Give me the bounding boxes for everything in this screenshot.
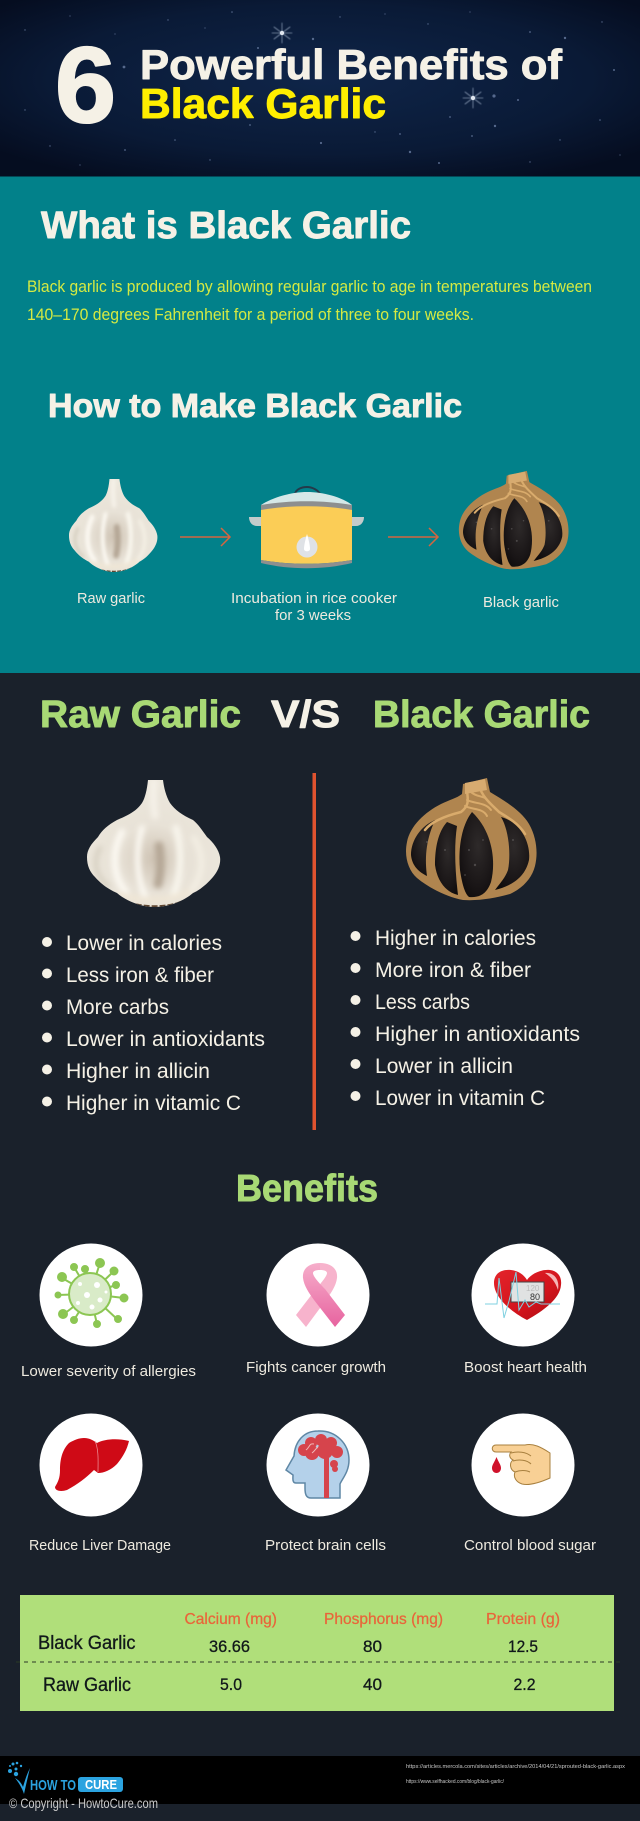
list: raw garlic traits: More carbs (66, 996, 169, 1019)
benefit: lower severity of allergies (21, 1244, 196, 1380)
list: raw garlic traits: Less iron & fiber (66, 964, 214, 987)
logo: How To Cure: HOW TO (30, 1777, 76, 1794)
heading: How to Make Black Garlic: How to Make Black Garlic (48, 387, 462, 424)
label: black garlic: Black garlic (483, 594, 559, 611)
list: black garlic traits: Less carbs (375, 991, 470, 1014)
icon: heart monitor: 120 (526, 1284, 540, 1293)
title: 6 Powerful Benefits of Black Garlic (55, 24, 563, 145)
logo: How To Cure: CURE (85, 1777, 117, 1792)
icon: black garlic large (406, 778, 537, 900)
sources: https://articles.mercola.com/sites/articles/archive/2014/04/21/sprouted-black-garlic.aspx (406, 1764, 625, 1770)
icon: pink ribbon (296, 1263, 345, 1327)
icon: rice cooker (249, 487, 364, 568)
row: black garlic: Black Garlic (38, 1633, 136, 1654)
list: black garlic traits: Lower in allicin (375, 1055, 513, 1078)
logo: How To Cure (8, 1762, 123, 1794)
benefit: control blood sugar (464, 1414, 596, 1554)
label: incubation: for 3 weeks (275, 607, 351, 624)
list: raw garlic traits: Lower in calories (66, 932, 222, 955)
panel: what is black garlic and how to make it (0, 176, 640, 673)
row: raw garlic: 5.0 (220, 1675, 242, 1694)
heading: raw garlic versus black garlic: V/S (271, 694, 340, 736)
benefit: fights cancer growth (246, 1244, 386, 1376)
row: black garlic: 36.66 (209, 1637, 250, 1656)
icon: virus (56, 1259, 128, 1327)
sources: https://www.selfhacked.com/blog/black-garlic/ (406, 1779, 505, 1785)
column headers (184, 1611, 560, 1628)
text block: definition (27, 278, 592, 324)
icon: heart monitor (485, 1270, 561, 1320)
panel: footer (0, 1756, 640, 1811)
label: Protect brain cells (265, 1537, 386, 1554)
list: black garlic traits (350, 927, 580, 1110)
heading: raw garlic versus black garlic: Raw Garlic (40, 694, 241, 736)
text block: definition: Black garlic is produced by allowing regular garlic to age in temperatures between (27, 278, 592, 296)
heading: raw garlic versus black garlic: Black Garlic (373, 694, 590, 736)
icon: head with brain (286, 1431, 349, 1498)
label: raw garlic: Raw garlic (77, 590, 145, 607)
list: raw garlic traits: Lower in antioxidants (66, 1028, 265, 1051)
panel: raw garlic comparison (42, 780, 265, 1115)
list: raw garlic traits: Higher in vitamic C (66, 1092, 241, 1115)
panel: nutrition table (16, 1595, 620, 1711)
list: raw garlic traits: Higher in allicin (66, 1060, 210, 1083)
panel: header starfield (0, 0, 640, 176)
column headers: Calcium (mg) (184, 1611, 277, 1628)
label: Reduce Liver Damage (29, 1537, 171, 1554)
label: Control blood sugar (464, 1537, 596, 1554)
benefit: protect brain cells (265, 1414, 386, 1554)
panel: black garlic comparison (350, 778, 580, 1110)
text block: definition: 140–170 degrees Fahrenheit for a period of three to four weeks. (27, 306, 474, 324)
arrow: raw garlic to cooker (180, 528, 230, 546)
column headers: Protein (g) (486, 1611, 560, 1628)
row: raw garlic (43, 1675, 536, 1696)
benefit: boost heart health (464, 1244, 587, 1376)
label: incubation: Incubation in rice cooker (231, 590, 397, 607)
row: black garlic: 12.5 (508, 1637, 538, 1656)
list: black garlic traits: Higher in antioxidants (375, 1023, 580, 1046)
icon: liver (55, 1438, 129, 1491)
title: 6 Powerful Benefits of Black Garlic: 6 (55, 24, 116, 145)
list: black garlic traits: Higher in calories (375, 927, 536, 950)
column headers: Phosphorus (mg) (324, 1611, 443, 1628)
icon: black garlic (459, 471, 569, 569)
copyright: © Copyright - HowtoCure.com (9, 1795, 158, 1811)
heading: benefits: Benefits (236, 1168, 378, 1210)
benefit: reduce liver damage (29, 1414, 171, 1554)
icon: raw garlic large (87, 780, 220, 907)
arrow: cooker to black garlic (388, 528, 438, 546)
icon: raw garlic (69, 479, 157, 572)
title: 6 Powerful Benefits of Black Garlic: Powerful Benefits of (140, 41, 563, 88)
label: Fights cancer growth (246, 1359, 386, 1376)
row: raw garlic: Raw Garlic (43, 1675, 131, 1696)
row: raw garlic: 40 (363, 1675, 382, 1694)
title: 6 Powerful Benefits of Black Garlic: Black Garlic (140, 80, 386, 127)
divider (312, 773, 316, 1130)
list: black garlic traits: Lower in vitamin C (375, 1087, 545, 1110)
sources (406, 1764, 625, 1785)
list: raw garlic traits (42, 932, 265, 1115)
label: incubation (231, 590, 397, 624)
icon: heart monitor: 80 (530, 1292, 540, 1302)
row: black garlic: 80 (363, 1637, 382, 1656)
label: Boost heart health (464, 1359, 587, 1376)
heading: raw garlic versus black garlic (40, 694, 590, 736)
icon: finger with blood drop (492, 1444, 550, 1485)
heading: What is Black Garlic: What is Black Garlic (41, 205, 411, 247)
row: black garlic (38, 1633, 538, 1656)
row: raw garlic: 2.2 (514, 1675, 536, 1694)
list: black garlic traits: More iron & fiber (375, 959, 531, 982)
label: Lower severity of allergies (21, 1363, 196, 1380)
